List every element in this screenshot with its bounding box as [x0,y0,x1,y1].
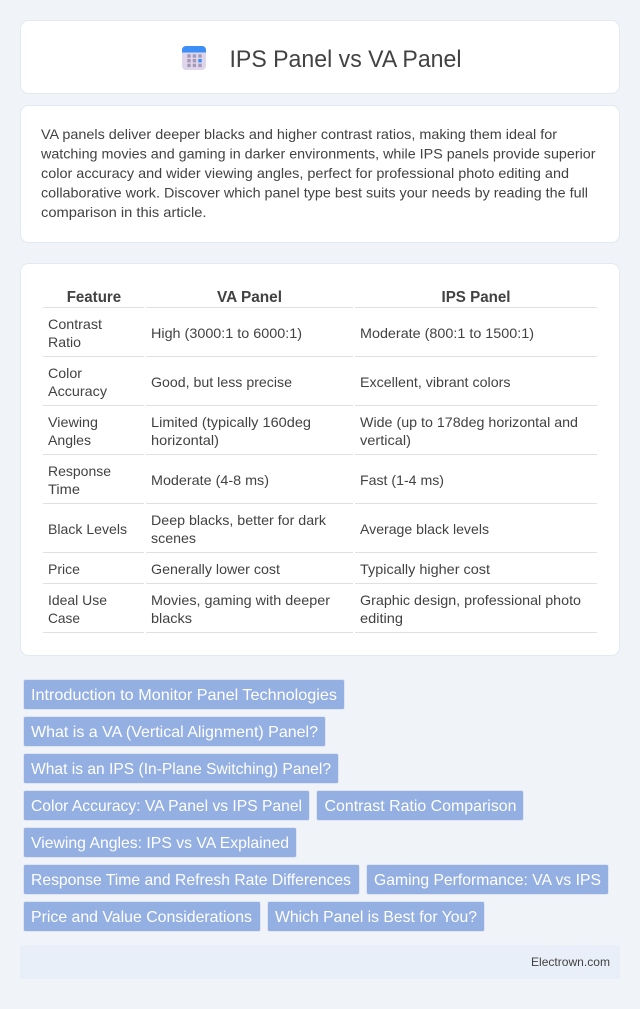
row: viewing angles: Limited (typically 160deg [151,414,311,430]
row: price: Typically higher cost [360,561,490,577]
tag: best for you: Which Panel is Best for You? [275,909,477,926]
table header: Feature [67,289,121,306]
tag: introduction [24,680,344,710]
row: viewing angles: Angles [48,432,91,448]
footer: Electrown.com [531,955,610,969]
table header [67,289,510,306]
row: response time: Time [48,481,80,497]
tag: what is IPS: What is an IPS (In-Plane Switching) Panel? [31,761,331,778]
row: ideal use case: Ideal Use [48,592,107,608]
tag: contrast ratio: Contrast Ratio Comparison [324,798,516,815]
row: color accuracy: Excellent, vibrant colors [360,374,510,390]
panel: summary text: watching movies and gaming in darker environments, while IPS panels provide superior [40,146,596,162]
table header: VA Panel [217,289,282,306]
icon: calendar grid [182,46,206,70]
row: contrast ratio: Contrast [48,316,102,332]
row: response time: Response [48,463,111,479]
row: response time: Fast (1-4 ms) [360,472,444,488]
row: response time [48,463,444,497]
tag: gaming performance [366,864,608,894]
row: price: Price [48,561,80,577]
row: black levels: Black Levels [48,521,127,537]
row: black levels: Average black levels [360,521,489,537]
row: viewing angles: Viewing [48,414,98,430]
tag: response time: Response Time and Refresh Rate Differences [31,872,351,889]
panel: summary text: collaborative work. Discover which panel type best suits your needs by reading the full [41,184,588,200]
tag: introduction: Introduction to Monitor Panel Technologies [31,687,337,704]
tag: best for you [268,902,484,932]
row: contrast ratio [48,316,534,350]
row: contrast ratio: Moderate (800:1 to 1500:1) [360,325,534,341]
tag: what is VA: What is a VA (Vertical Alignment) Panel? [31,724,318,741]
row: ideal use case: Graphic design, professional photo [360,592,581,608]
row: contrast ratio: Ratio [48,334,81,350]
title: IPS Panel vs VA Panel [230,46,462,73]
row: color accuracy [48,365,510,399]
row: black levels: scenes [151,530,196,546]
tag: price and value [24,902,260,932]
row: price: Generally lower cost [151,561,280,577]
table header: IPS Panel [442,289,510,306]
row: viewing angles: vertical) [360,432,411,448]
row: black levels [48,512,489,546]
row: response time: Moderate (4-8 ms) [151,472,269,488]
row: color accuracy: Accuracy [48,383,107,399]
row: viewing angles [48,414,578,448]
tag: color accuracy: Color Accuracy: VA Panel vs IPS Panel [31,798,302,815]
tag: what is VA [24,716,326,746]
tag: gaming performance: Gaming Performance: VA vs IPS [374,872,601,889]
topic tag links [24,680,608,932]
tag: what is IPS [24,754,338,784]
row: color accuracy: Good, but less precise [151,374,292,390]
row: ideal use case: blacks [151,610,192,626]
tag: response time [24,864,360,894]
row: color accuracy: Color [48,365,82,381]
row: viewing angles: Wide (up to 178deg horizontal and [360,414,578,430]
panel: title card [20,20,620,94]
row: contrast ratio: High (3000:1 to 6000:1) [151,325,302,341]
panel: summary text: comparison in this article. [41,204,206,220]
tag: color accuracy [24,790,310,820]
row: ideal use case [48,592,581,626]
row: ideal use case: Movies, gaming with deeper [151,592,330,608]
tag: contrast ratio [316,790,524,820]
panel: summary text [20,106,620,242]
footer [20,945,620,979]
tag: viewing angles: Viewing Angles: IPS vs VA Explained [31,835,289,852]
row: viewing angles: horizontal) [151,432,219,448]
row: price [48,561,490,577]
row: ideal use case: Case [48,610,80,626]
row: ideal use case: editing [360,610,403,626]
panel: comparison table [20,264,620,656]
tag: viewing angles [24,828,296,858]
row: black levels: Deep blacks, better for dark [151,512,327,528]
panel: summary text: VA panels deliver deeper blacks and higher contrast ratios, making them ideal for [41,126,557,142]
panel: summary text: color accuracy and wider viewing angles, perfect for professional photo editing and [41,165,569,181]
tag: price and value: Price and Value Considerations [31,909,252,926]
